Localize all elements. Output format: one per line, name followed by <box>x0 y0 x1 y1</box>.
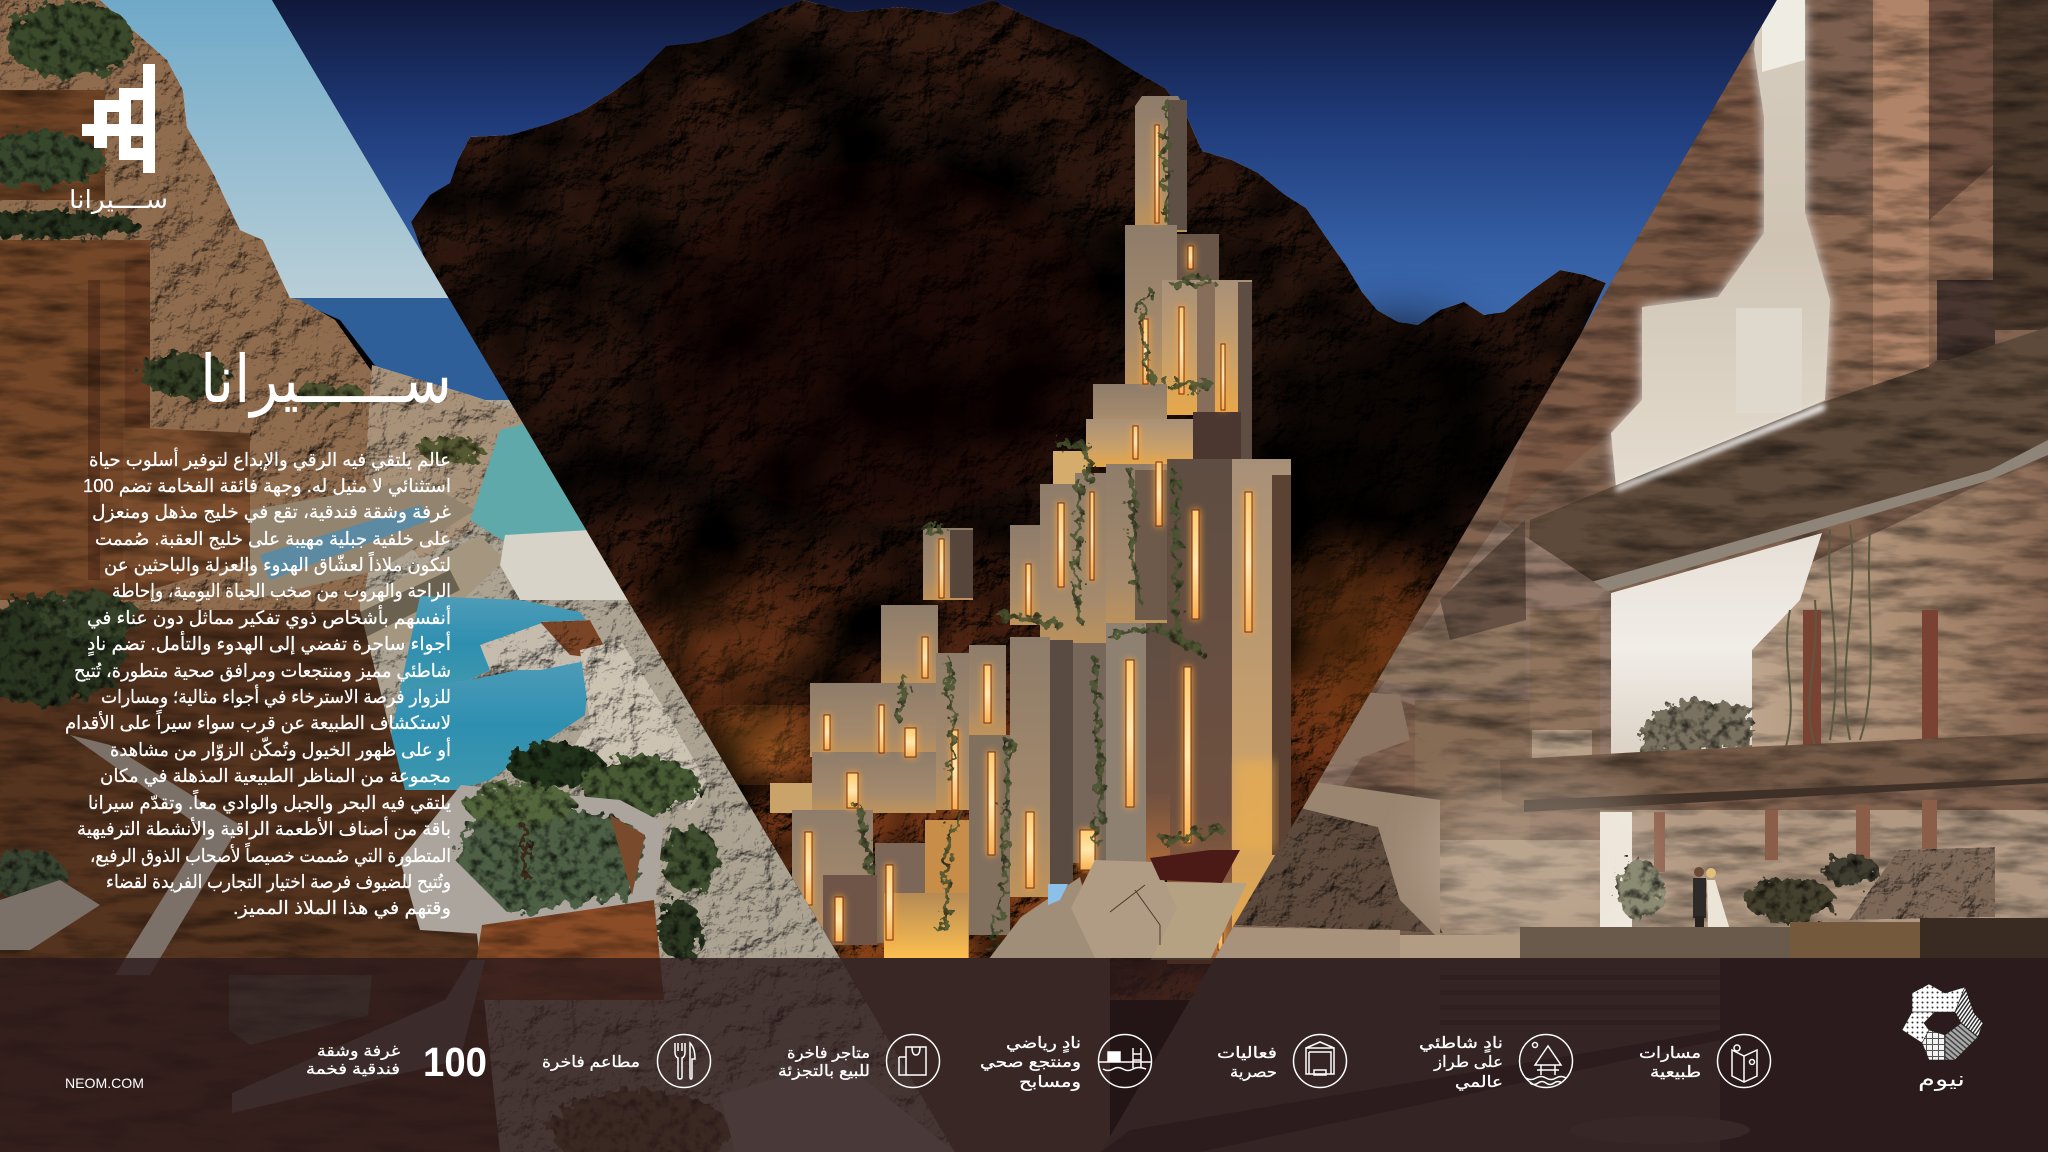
NEOM wordmark: نيوم <box>1918 1068 1965 1091</box>
haze <box>1420 770 1660 950</box>
light shaft <box>1611 0 1830 487</box>
body paragraph: وقتهم في هذا الملاذ المميز. <box>233 897 451 919</box>
red slots <box>1803 610 1938 760</box>
sky <box>100 0 456 310</box>
body paragraph: غرفة وشقة فندقية، تقع في خليج مذهل ومنعزل <box>92 501 451 523</box>
shrubs <box>1616 854 1878 922</box>
wall below lower beam <box>1600 810 2048 935</box>
feature: beach club: على طراز <box>1433 1054 1503 1071</box>
cliff <box>0 0 395 620</box>
body paragraph: للزوار فرصة الاسترخاء في أجواء مثالية؛ ومسارات <box>101 684 451 708</box>
stony coast base <box>364 400 955 1152</box>
body paragraph: لتكون ملاذاً لعشّاق الهدوء والعزلة والباحثين عن <box>104 551 451 576</box>
tower lower <box>770 459 1291 964</box>
feature: events: فعاليات <box>1217 1045 1277 1062</box>
lagoon <box>470 420 590 545</box>
left wall blocks <box>1300 520 1611 940</box>
hanging roots <box>1639 525 1871 930</box>
chevron walkways <box>0 735 485 1113</box>
body paragraph: لاستكشاف الطبيعة عن قرب سواء سيراً على الأقدام <box>65 709 451 734</box>
logo: NEOM <box>1902 984 1983 1091</box>
body paragraph: أنفسهم بأشخاص ذوي تفكير مماثل دون عناء في <box>87 605 451 629</box>
wall base <box>1100 0 2048 1152</box>
stat: 100 rooms: فندقية فخمة <box>306 1061 400 1078</box>
brown wall <box>0 610 500 1152</box>
upper beam <box>1527 327 2048 615</box>
bottom dark info band <box>0 958 2048 1152</box>
feature: nature trails: مسارات <box>1639 1045 1701 1062</box>
boulders <box>988 850 1247 960</box>
right wall below beam <box>1752 460 2048 770</box>
logo: Sirana mark <box>69 64 168 214</box>
NEOM star mark <box>1902 984 1983 1060</box>
tower upper <box>1053 96 1252 487</box>
pool lower <box>391 662 586 790</box>
dark rock face <box>1232 807 1443 933</box>
panel: left photo of coast and terraces <box>0 0 980 1152</box>
floor and stairs <box>1100 918 2048 1152</box>
website label: NEOM.COM <box>65 1075 144 1091</box>
body paragraph: شاطئي مميز ومنتجعات ومرافق صحية متطورة، تُتيح <box>74 660 451 682</box>
planter on ledge <box>1640 700 1752 756</box>
icon: pool ladder <box>1098 1034 1152 1088</box>
feature: nature trails: طبيعية <box>1650 1064 1701 1081</box>
overhanging rock <box>1500 40 1764 520</box>
rock below tower <box>840 958 1110 1152</box>
feature: events: حصرية <box>1230 1064 1277 1081</box>
sand <box>500 530 640 600</box>
body paragraph: يلتقي فيه البحر والجبل والوادي معاً. وتقدّم سيرانا <box>88 789 451 814</box>
wall top left <box>0 90 150 600</box>
sea <box>290 298 522 422</box>
feature: sports club: ومنتجع صحي <box>980 1054 1081 1072</box>
night sky <box>272 0 1777 340</box>
panel: right photo of canyon interior <box>1100 0 2048 1152</box>
planter <box>400 785 664 1000</box>
mountain shading <box>640 160 1520 770</box>
body paragraph: مجموعة من المناظر الطبيعية المذهلة في مكان <box>100 765 451 787</box>
feature: restaurants: مطاعم فاخرة <box>542 1054 640 1071</box>
Sirana logo glyph <box>82 64 155 173</box>
right boulder <box>1849 847 1995 920</box>
feature: sports club: نادٍ رياضي <box>1006 1035 1081 1053</box>
hanging vines <box>860 100 1220 950</box>
shore rocks <box>365 365 560 560</box>
feature: beach club: عالمي <box>1455 1074 1503 1092</box>
feature: retail: متاجر فاخرة <box>787 1045 870 1062</box>
stat: 100 rooms: غرفة وشقة <box>317 1043 400 1061</box>
pale paving <box>720 1060 955 1152</box>
icon: shopping bags <box>886 1034 940 1088</box>
trees middle <box>506 739 724 962</box>
body paragraph: باقة من أصناف الأطعمة الراقية والأنشطة الترفيهية <box>77 816 451 840</box>
body paragraph: على خلفية جبلية مهيبة على خليج العقبة. صُممت <box>95 528 451 550</box>
stone terraces <box>250 480 505 660</box>
feature: beach club: نادٍ شاطئي <box>1419 1035 1503 1053</box>
icon: map <box>1718 1034 1770 1088</box>
feature: sports club <box>980 1034 1152 1092</box>
feature: retail: للبيع بالتجزئة <box>778 1063 870 1081</box>
light opening <box>1600 533 1822 765</box>
rock islands <box>480 620 708 810</box>
pool upper <box>400 596 600 690</box>
couple <box>1693 867 1730 954</box>
body paragraph: أجواء ساحرة تفضي إلى الهدوء والتأمل. تضم نادٍ <box>87 631 451 656</box>
trees on wall <box>0 2 730 1152</box>
body paragraph <box>65 447 451 919</box>
hanging boulder <box>1370 590 1526 698</box>
lit windows <box>805 125 1252 950</box>
body paragraph: المتطورة التي صُممت خصيصاً لأصحاب الذوق الرفيع، <box>90 842 451 867</box>
feature: events <box>1217 1034 1346 1088</box>
icon: cutlery <box>658 1034 710 1088</box>
feature: restaurants <box>542 1034 710 1088</box>
body paragraph: أو على ظهور الخيول وتُمكّن الزوّار من مشاهدة <box>110 737 451 761</box>
planter tree <box>465 783 575 880</box>
planter under band <box>229 975 372 1045</box>
body paragraph: عالم يلتقي فيه الرقي والإبداع لتوفير أسلوب حياة <box>89 447 451 471</box>
feature: nature trails <box>1639 1034 1770 1088</box>
feature: beach club <box>1419 1034 1572 1092</box>
stat: 100 rooms <box>306 1039 487 1085</box>
icon: beach hut on water <box>1520 1034 1572 1088</box>
title: ســــــيرانا <box>200 342 452 418</box>
panel: centre photo of tower at dusk <box>272 0 1777 1152</box>
icon: stage <box>1294 1034 1346 1088</box>
Sirana logo wordmark: ســــيرانا <box>69 186 168 214</box>
feature: retail <box>778 1034 940 1088</box>
feature: sports club: ومسابح <box>1019 1074 1081 1092</box>
lower beam <box>1500 733 2048 812</box>
mountain <box>411 0 1606 1000</box>
hex planter top <box>123 427 250 590</box>
body paragraph: استثنائي لا مثيل له. وجهة فائقة الفخامة تضم 100 <box>83 475 451 497</box>
stat: 100 rooms: 100 <box>423 1039 487 1085</box>
upper columns <box>1805 0 2048 405</box>
body paragraph: الراحة والهروب من صخب الحياة اليومية، وإحاطة <box>112 580 451 602</box>
body paragraph: وتُتيح للضيوف فرصة اختيار التجارب الفريدة لقضاء <box>106 871 451 893</box>
